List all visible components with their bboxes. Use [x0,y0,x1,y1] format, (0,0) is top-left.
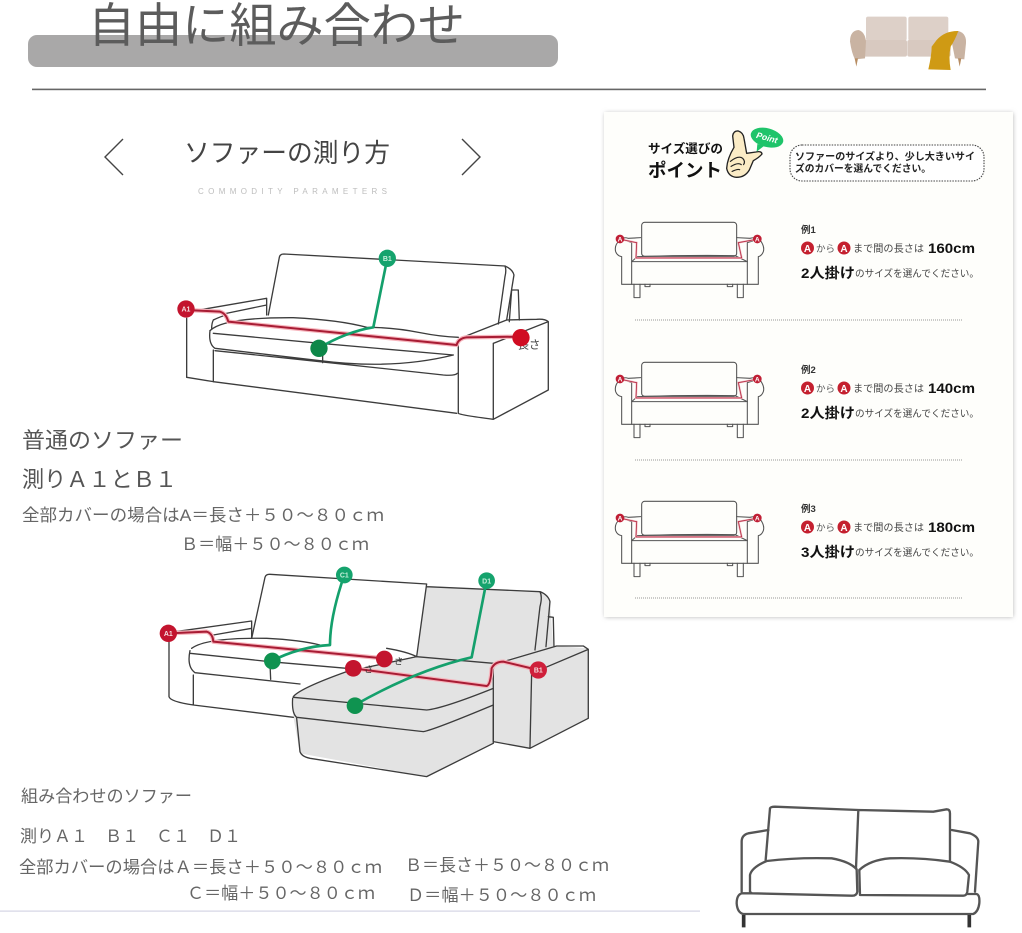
example 3 text: A [804,523,811,534]
example 3 text: まで間の長さは [853,522,924,534]
icon: hand with point bubble: Point [755,130,780,146]
example 2 text: A [804,384,811,395]
text block: standard sofa measurements: 測りＡ１とＢ１ [22,467,177,492]
text block: combination sofa measurements: 測りＡ１ Ｂ１ Ｃ１ Ｄ１ [20,827,241,846]
diagram: standard sofa [177,250,548,419]
label: B1: B1 [383,256,392,263]
panel heading [648,141,723,181]
panel heading: ポイント [648,160,722,181]
label: A1 [177,300,195,318]
example 3 [615,501,979,577]
example 1 text: から [816,244,835,255]
example 2 text: 140cm [928,380,975,396]
example 3 text: A [840,523,848,534]
icon: sofa diagram 1: A [618,236,623,243]
icon: sofa diagram 3: A [755,515,760,522]
example 3 text: から [816,523,835,534]
icon: sofa diagram 2: A [755,376,760,383]
label: length mark lower: さ [364,665,373,675]
icon: front-view sofa outline [737,807,979,927]
label: D1: D1 [482,578,491,585]
label: A1: A1 [182,307,191,314]
label: B1 [530,661,547,679]
label: length mark upper [376,651,403,667]
example 3 text: 3人掛け [801,544,855,560]
icon: sofa diagram 1: A [755,236,760,243]
example 3 text [801,503,979,560]
example 3 text: 180cm [928,519,975,535]
text block: combination sofa measurements: Ｃ＝幅＋５０～８０ｃｍ [187,884,375,903]
diagram: combination sofa [160,567,588,777]
example 1 text: 160cm [928,240,975,256]
example 1 text: 2人掛け [801,265,855,281]
text block: combination sofa measurements [19,787,609,905]
label: C1: C1 [340,573,349,580]
label: length mark lower [345,660,373,677]
label: A1: A1 [164,631,173,638]
icon: sofa diagram 2: A [618,376,623,383]
heading subtitle: COMMODITY PARAMETERS [198,187,387,196]
text block: standard sofa measurements: Ｂ＝幅＋５０～８０ｃｍ [181,535,369,554]
text block: combination sofa measurements: 組み合わせのソファー [21,787,192,806]
text block: combination sofa measurements: 全部カバーの場合はＡ＝長さ＋５０～８０ｃｍ [19,858,382,877]
example 1 text: のサイズを選んでください。 [855,267,979,280]
example 3 text: 例3 [801,503,816,515]
icon: beige sofa thumbnail [850,17,966,70]
example 3 text: のサイズを選んでください。 [855,546,979,559]
label: D1 [478,572,495,589]
heading: how to measure a sofa [105,138,480,196]
example 2 text [801,364,979,421]
icon: sofa diagram 3 [615,501,764,577]
label: seat point [310,340,328,357]
text block: standard sofa measurements: 全部カバーの場合はA＝長さ＋５０～８０ｃｍ [22,506,384,525]
example 1 text: まで間の長さは [853,243,924,255]
example 2 text: A [840,384,848,395]
label: seat point D [347,697,363,714]
example 2 text: 例2 [801,364,816,376]
panel: size selection points [604,112,1013,617]
text block: combination sofa measurements: Ｂ＝長さ＋５０～８０ｃｍ [405,856,609,875]
label: measure end: 長さ [518,338,540,351]
icon: sofa diagram 1 [615,222,764,298]
example 1 text: 例1 [801,224,816,236]
title: 自由に組み合わせ [88,0,465,52]
example 2 text: まで間の長さは [853,383,924,395]
example 1 text: A [804,244,811,255]
panel heading: サイズ選びの [648,141,723,156]
label: B1 [379,250,396,267]
icon: hand with point bubble [727,124,786,177]
callout: choose a larger cover: ソファーのサイズより、少し大きいサイ [795,150,975,163]
example 1 text [801,224,979,281]
heading text: ソファーの測り方 [184,138,390,168]
example 2 [615,362,979,438]
arrow: left chevron [105,139,123,175]
text block: standard sofa measurements [22,428,384,554]
header divider [32,89,986,90]
bottom divider [0,910,700,912]
label: seat point C [264,653,281,669]
label: B1: B1 [534,668,543,675]
icon: sofa diagram 3: A [618,515,623,522]
label: length mark upper: さ [394,656,403,666]
arrow: right chevron [462,139,480,175]
label: A1 [160,625,177,642]
callout: choose a larger cover [790,145,984,181]
example 2 text: から [816,384,835,395]
callout: choose a larger cover: ズのカバーを選んでください。 [795,162,931,175]
text block: combination sofa measurements: Ｄ＝幅＋５０～８０ｃｍ [407,886,596,905]
header bar [28,35,558,67]
example 1 text: A [840,244,848,255]
example 2 text: のサイズを選んでください。 [855,407,979,420]
example 1 [615,222,979,298]
text block: standard sofa measurements: 普通のソファー [22,428,183,453]
example 2 text: 2人掛け [801,405,855,421]
icon: sofa diagram 2 [615,362,764,438]
label: measure end [512,329,540,351]
label: C1 [336,567,353,583]
